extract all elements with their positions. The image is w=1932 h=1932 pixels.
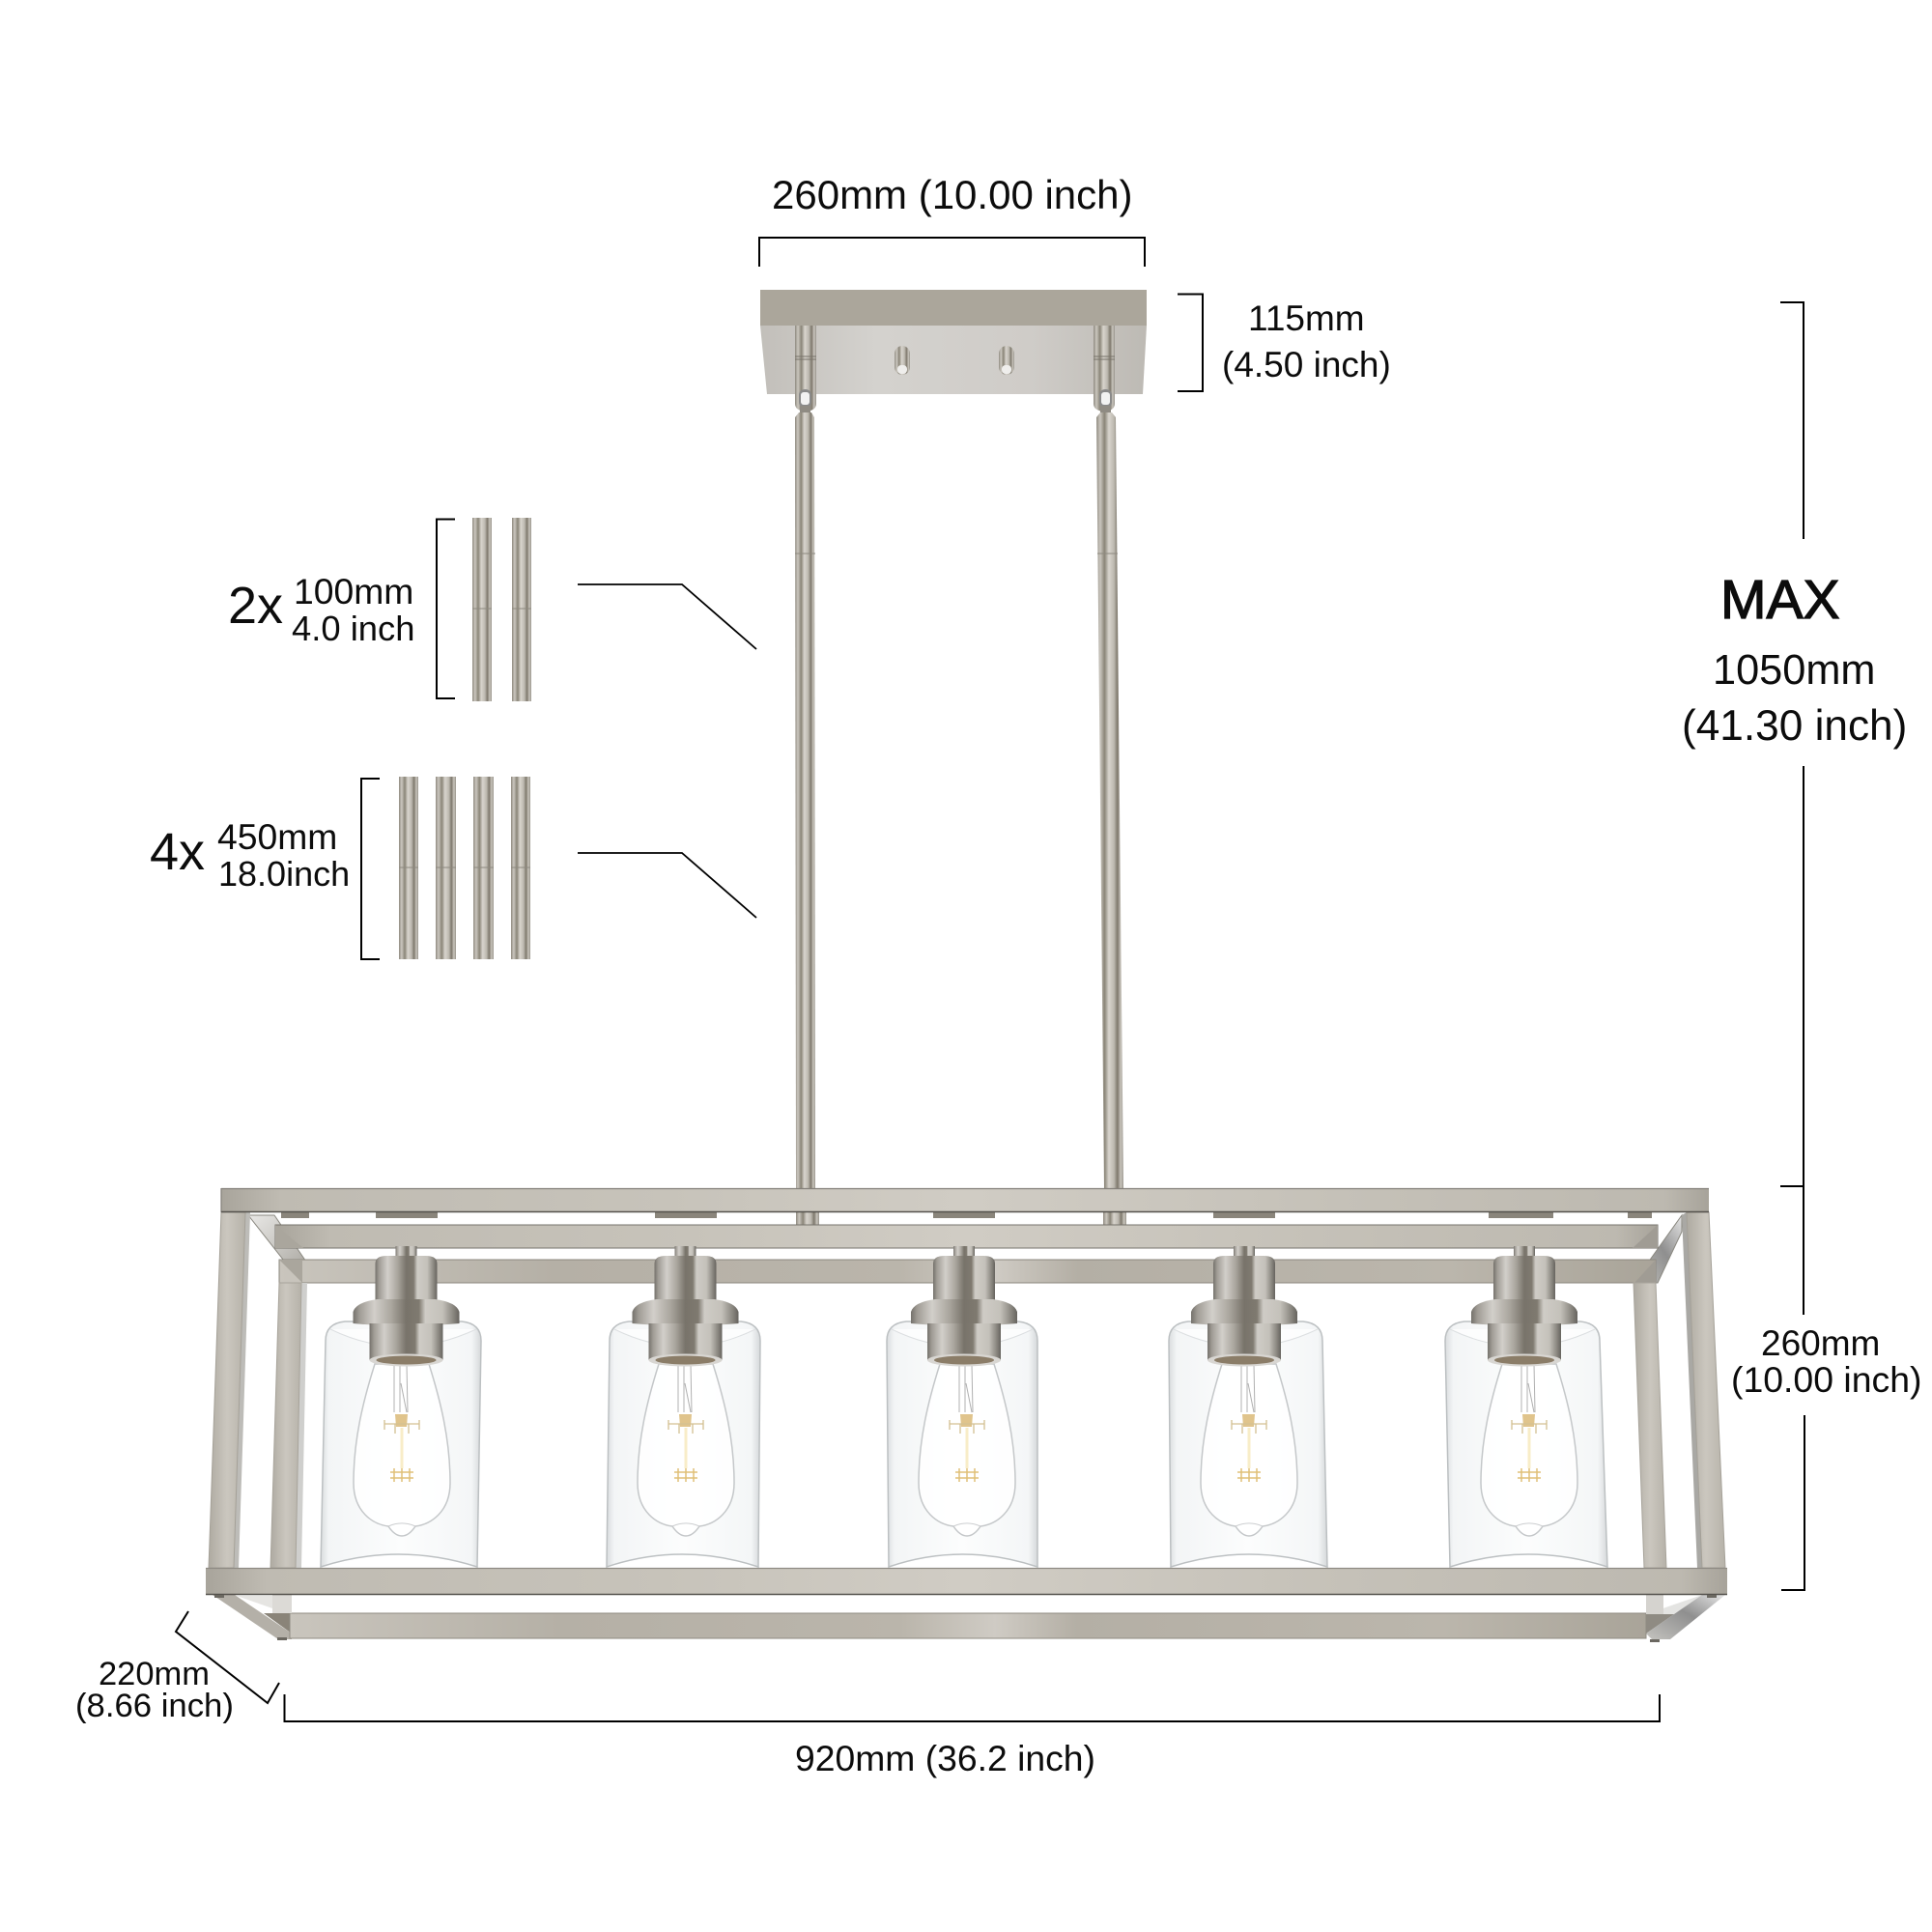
spare rods: 2x 100mm	[228, 518, 531, 701]
bracket	[1178, 294, 1203, 391]
outer post right	[1687, 1212, 1725, 1568]
length inch: 4.0 inch	[292, 609, 414, 648]
strut top right	[1634, 1215, 1682, 1283]
glass shade 3	[887, 1321, 1037, 1567]
inner post right	[1634, 1283, 1666, 1568]
leader line to 100mm rod section	[578, 584, 756, 649]
top bracket line	[1780, 302, 1804, 539]
label inch: (4.50 inch)	[1222, 345, 1391, 384]
pendant 5	[1445, 1246, 1607, 1567]
socket 4	[1191, 1246, 1297, 1366]
dimension: max height	[1682, 302, 1907, 1315]
label inch: (10.00 inch)	[1731, 1359, 1921, 1400]
bracket	[284, 1694, 1660, 1721]
bottom bar	[206, 1568, 1727, 1595]
bulb 3	[919, 1364, 1015, 1536]
left suspension rod	[795, 406, 815, 1189]
back upper bar 1	[275, 1225, 1658, 1248]
strut bottom right	[1646, 1595, 1725, 1639]
strut top left	[248, 1215, 321, 1283]
bracket	[361, 779, 380, 959]
dimension: canopy depth	[1178, 294, 1391, 391]
top bar	[221, 1188, 1709, 1212]
label inch: (8.66 inch)	[75, 1688, 234, 1724]
chrome strip right	[1682, 1212, 1702, 1568]
glass shade 5	[1445, 1321, 1607, 1567]
length mm: 450mm	[217, 816, 337, 857]
outer post left	[209, 1212, 245, 1568]
socket 3	[911, 1246, 1017, 1366]
glass shade 4	[1169, 1321, 1327, 1567]
rod	[473, 777, 494, 959]
pendant 1	[321, 1246, 481, 1567]
pendant 4	[1169, 1246, 1327, 1567]
frame feet	[214, 1595, 1717, 1642]
quantity: 4x	[150, 823, 205, 881]
glass lip 1	[330, 1329, 476, 1347]
dimension: fixture depth	[75, 1611, 279, 1724]
canopy screw right	[999, 346, 1014, 375]
label mm: 220mm	[99, 1656, 210, 1692]
quantity: 2x	[228, 577, 283, 635]
canopy plate	[760, 290, 1147, 412]
bottom bracket line	[1803, 766, 1804, 1315]
inner post left	[270, 1283, 307, 1568]
label mm: 260mm	[1761, 1323, 1880, 1363]
bracket	[759, 238, 1145, 267]
bulb 1	[354, 1364, 450, 1536]
glass shade 1	[321, 1321, 481, 1567]
length mm: 100mm	[294, 571, 413, 611]
back lower bar	[290, 1613, 1646, 1638]
length inch: 18.0inch	[218, 854, 350, 894]
inner post left lower	[272, 1594, 292, 1613]
socket 2	[632, 1246, 738, 1366]
bulb 4	[1201, 1364, 1297, 1536]
right suspension rod	[1096, 406, 1123, 1189]
bulb 2	[638, 1364, 734, 1536]
MAX heading: MAX	[1720, 569, 1840, 631]
rod	[472, 518, 492, 701]
glass shade 2	[607, 1321, 760, 1567]
fixture frame front bars	[206, 1188, 1727, 1642]
glass lip 4	[1174, 1329, 1318, 1347]
bracket	[437, 520, 455, 698]
label mm: 115mm	[1248, 298, 1365, 338]
label inch: (41.30 inch)	[1682, 702, 1907, 750]
glass lip 5	[1450, 1329, 1595, 1347]
glass lip 3	[892, 1329, 1033, 1347]
inner post right lower	[1646, 1594, 1663, 1614]
socket 5	[1471, 1246, 1577, 1366]
pendant 2	[607, 1246, 760, 1567]
fixture frame rear	[209, 1212, 1725, 1639]
label: 920mm (36.2 inch)	[795, 1738, 1095, 1778]
right canopy stem	[1094, 326, 1115, 412]
strut bottom left	[213, 1595, 292, 1639]
bracket	[176, 1611, 279, 1703]
rod pins under top bar	[796, 1211, 1126, 1225]
bulb 5	[1481, 1364, 1577, 1536]
glass lip 2	[614, 1329, 755, 1347]
back upper bar 2	[279, 1260, 1656, 1283]
canopy screw left	[895, 346, 910, 375]
label: 260mm (10.00 inch)	[772, 172, 1133, 217]
rod	[399, 777, 418, 959]
left canopy stem	[795, 326, 816, 412]
rod	[436, 777, 456, 959]
pendant 3	[887, 1246, 1037, 1567]
rod	[512, 518, 531, 701]
chrome strip left	[234, 1212, 250, 1568]
top tick	[1780, 1185, 1804, 1187]
label mm: 1050mm	[1713, 647, 1875, 694]
lower line	[1781, 1415, 1804, 1590]
rod	[511, 777, 530, 959]
dimension: canopy width	[759, 172, 1145, 267]
socket 1	[354, 1246, 460, 1366]
underside mounts	[281, 1212, 1652, 1218]
leader line to 450mm rod section	[578, 853, 756, 918]
spare rods: 4x 450mm	[150, 777, 530, 959]
dimension: fixture length	[284, 1694, 1660, 1778]
dimension: fixture height	[1731, 1186, 1921, 1590]
